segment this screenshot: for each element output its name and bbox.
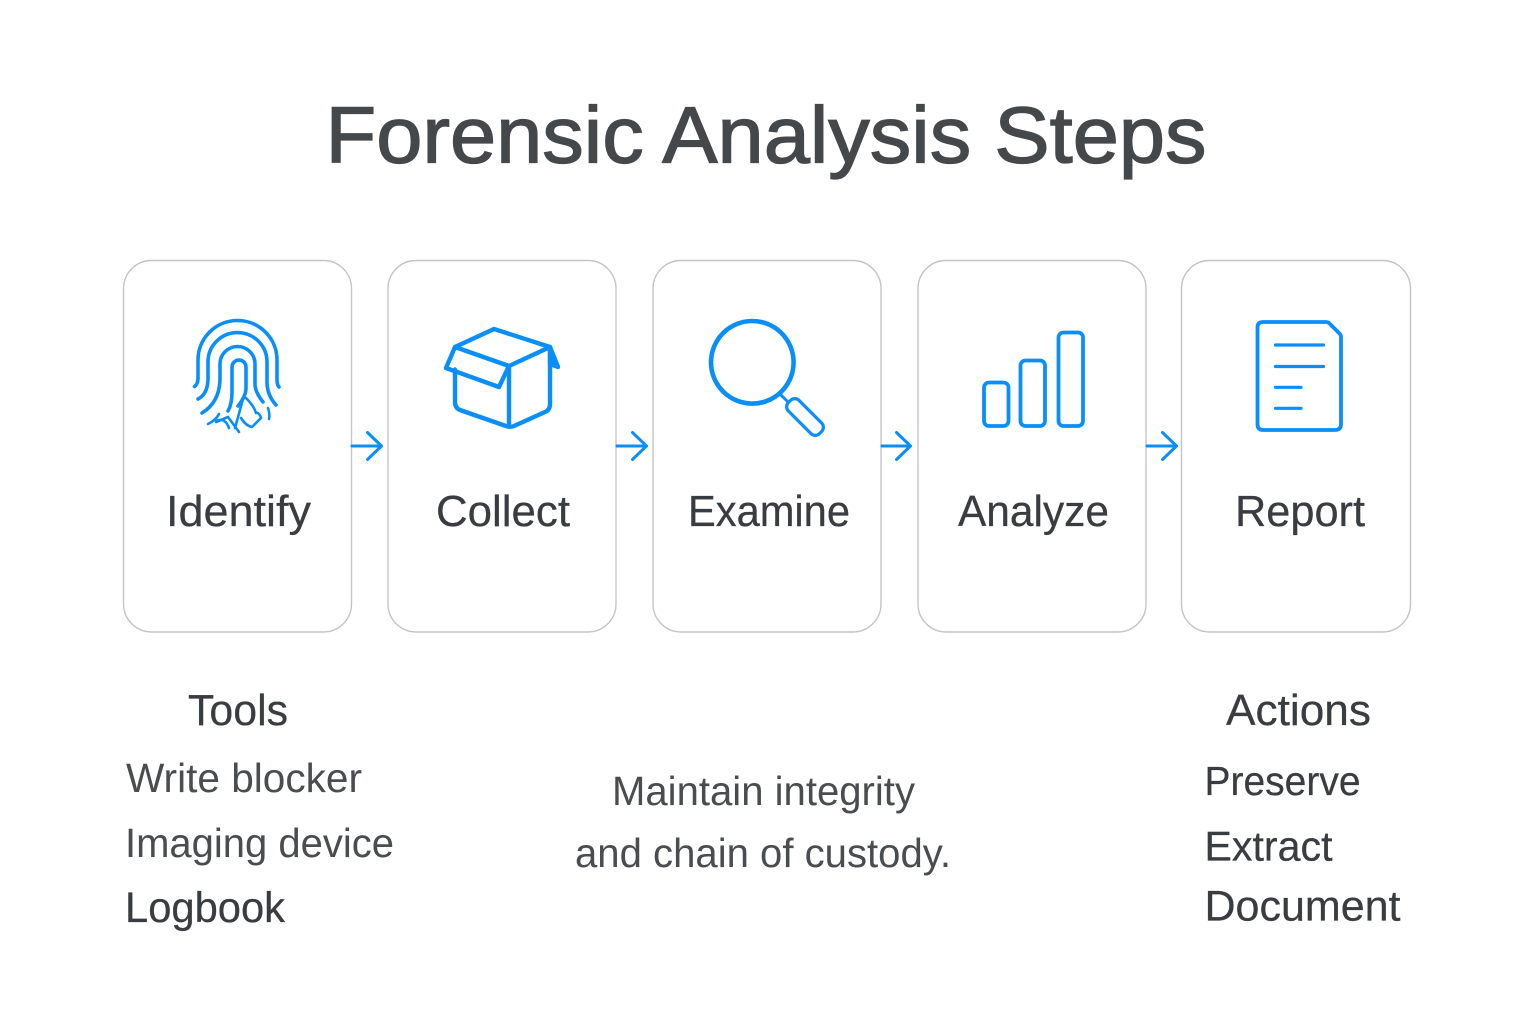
integrity note xyxy=(575,768,951,876)
tools list xyxy=(125,686,394,932)
icon: magnifying glass xyxy=(711,321,826,438)
arrow 4 xyxy=(1147,432,1176,460)
icon: box xyxy=(446,329,558,427)
note line 1: Maintain integrity xyxy=(612,768,915,814)
arrow 3 xyxy=(882,432,910,460)
icon: bar chart xyxy=(984,332,1083,426)
action: preserve: Preserve xyxy=(1204,758,1360,804)
arrow 1 xyxy=(352,432,382,460)
panel: Collect xyxy=(388,260,616,632)
panel: Report xyxy=(1182,260,1410,632)
action: extract: Extract xyxy=(1204,822,1333,870)
panel: Identify xyxy=(124,260,352,632)
tool: logbook: Logbook xyxy=(125,884,285,932)
actions list xyxy=(1204,686,1401,930)
tool: write blocker: Write blocker xyxy=(126,755,362,801)
title: Forensic Analysis Steps xyxy=(326,90,1206,180)
tool: imaging device: Imaging device xyxy=(125,820,394,866)
note line 2: and chain of custody. xyxy=(575,830,951,876)
actions heading: Actions xyxy=(1226,686,1371,735)
label: Analyze: Analyze xyxy=(958,487,1109,536)
label: Examine: Examine xyxy=(688,487,850,536)
panel: Analyze xyxy=(918,260,1146,632)
arrow 2 xyxy=(617,432,646,460)
label: Report: Report xyxy=(1235,487,1365,536)
label: Identify: Identify xyxy=(166,487,311,536)
panel: Examine xyxy=(653,260,881,632)
icon: fingerprint xyxy=(194,320,279,432)
icon: document xyxy=(1258,322,1341,430)
label: Collect: Collect xyxy=(436,487,570,536)
action: document: Document xyxy=(1204,882,1401,930)
tools heading: Tools xyxy=(188,686,288,735)
